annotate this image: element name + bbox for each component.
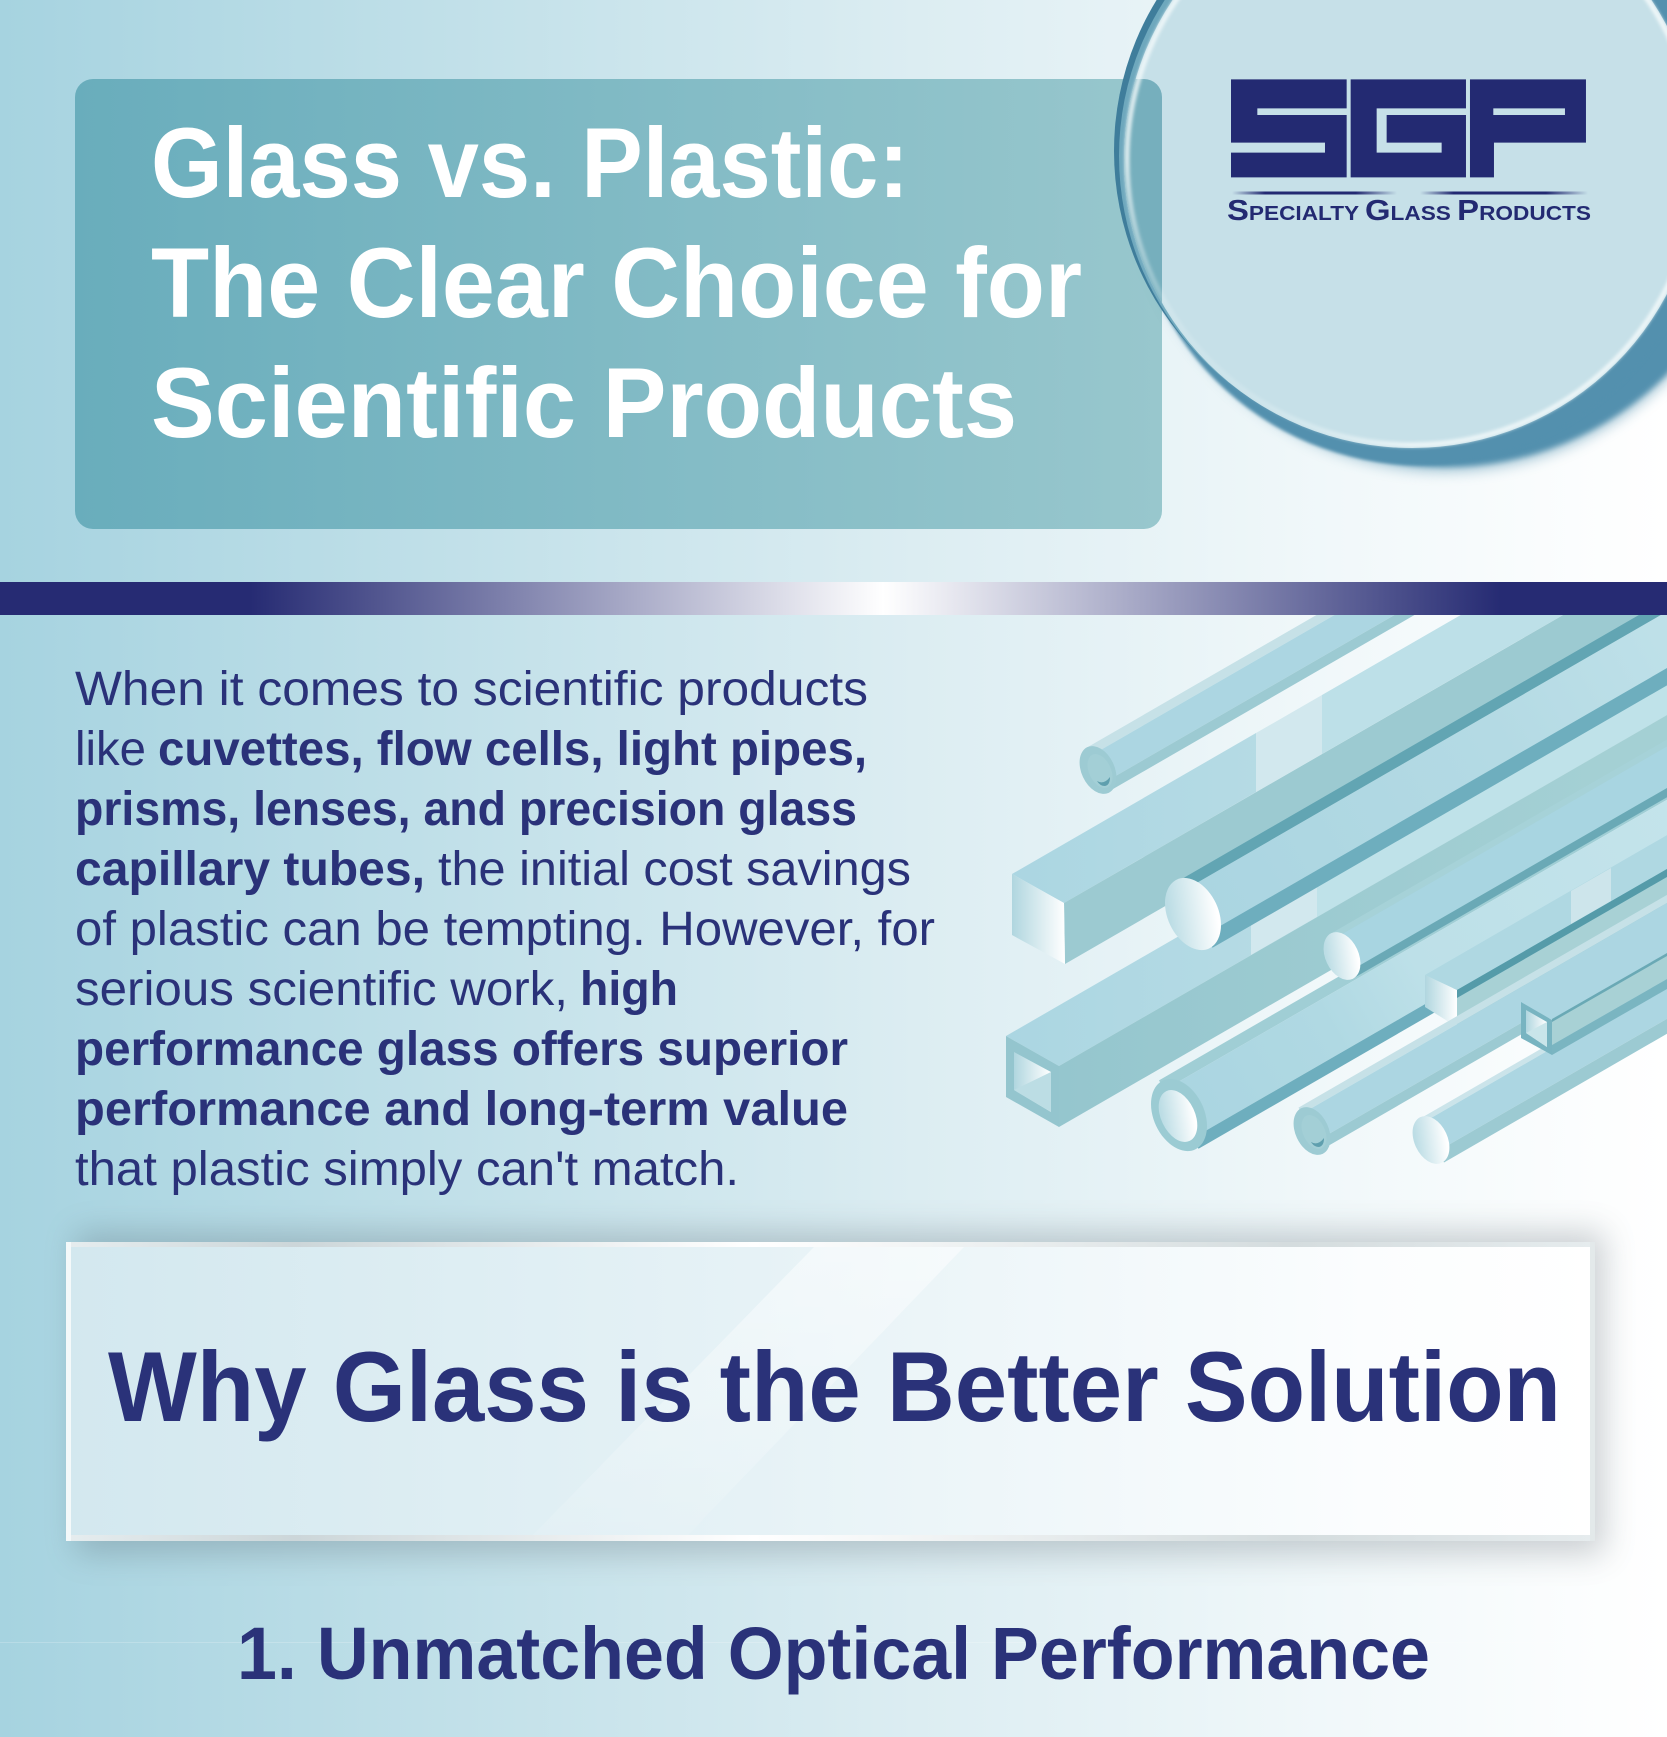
- intro paragraph: cuvettes, flow cells, light pipes,: [158, 723, 867, 776]
- intro paragraph: capillary tubes,: [75, 843, 425, 896]
- intro paragraph: the initial cost savings: [438, 843, 911, 896]
- intro paragraph: [75, 663, 935, 1196]
- intro paragraph: of plastic can be tempting. However, for: [75, 903, 935, 956]
- intro paragraph: performance glass offers superior: [75, 1023, 848, 1076]
- panel: why glass banner: [66, 1232, 1604, 1554]
- divider bar: [0, 582, 1667, 615]
- illustration: glass rods and tubes: [1006, 615, 1667, 1164]
- title heading: Glass vs. Plastic:: [151, 107, 909, 218]
- banner heading: Why Glass is the Better Solution: [108, 1331, 1561, 1442]
- logo mark: [1231, 79, 1586, 177]
- intro paragraph: serious scientific work,: [75, 963, 568, 1016]
- intro paragraph: like: [75, 723, 146, 776]
- glass lens circle: [1114, 0, 1667, 480]
- rod: small tube top: [1080, 615, 1414, 794]
- intro paragraph: prisms, lenses, and precision glass: [75, 783, 857, 836]
- intro paragraph: that plastic simply can't match.: [75, 1143, 739, 1196]
- intro paragraph: When it comes to scientific products: [75, 663, 868, 716]
- logo wordmark: SPECIALTY GLASS PRODUCTS: [1227, 195, 1591, 227]
- section heading: optical performance: 1. Unmatched Optical Performance: [237, 1612, 1430, 1695]
- rod: hollow square long: [1006, 635, 1667, 1127]
- title heading: [151, 107, 1082, 458]
- rod: hollow square small: [1521, 938, 1667, 1055]
- rod: hollow cylinder: [1151, 788, 1667, 1152]
- logo: SGP Specialty Glass Products: [1227, 79, 1591, 227]
- rod: solid cylinder lower right: [1412, 979, 1667, 1164]
- rod: solid cylinder middle: [1324, 746, 1667, 980]
- rod: solid cylinder big: [1165, 615, 1667, 950]
- title heading: Scientific Products: [151, 347, 1017, 458]
- intro paragraph: high: [580, 963, 678, 1016]
- intro paragraph: performance and long-term value: [75, 1083, 848, 1136]
- rod: solid square big: [1012, 615, 1661, 964]
- rod: solid square small: [1425, 835, 1667, 1024]
- panel: title: [75, 79, 1162, 529]
- title heading: The Clear Choice for: [151, 227, 1082, 338]
- rod: small tube lower: [1294, 895, 1667, 1155]
